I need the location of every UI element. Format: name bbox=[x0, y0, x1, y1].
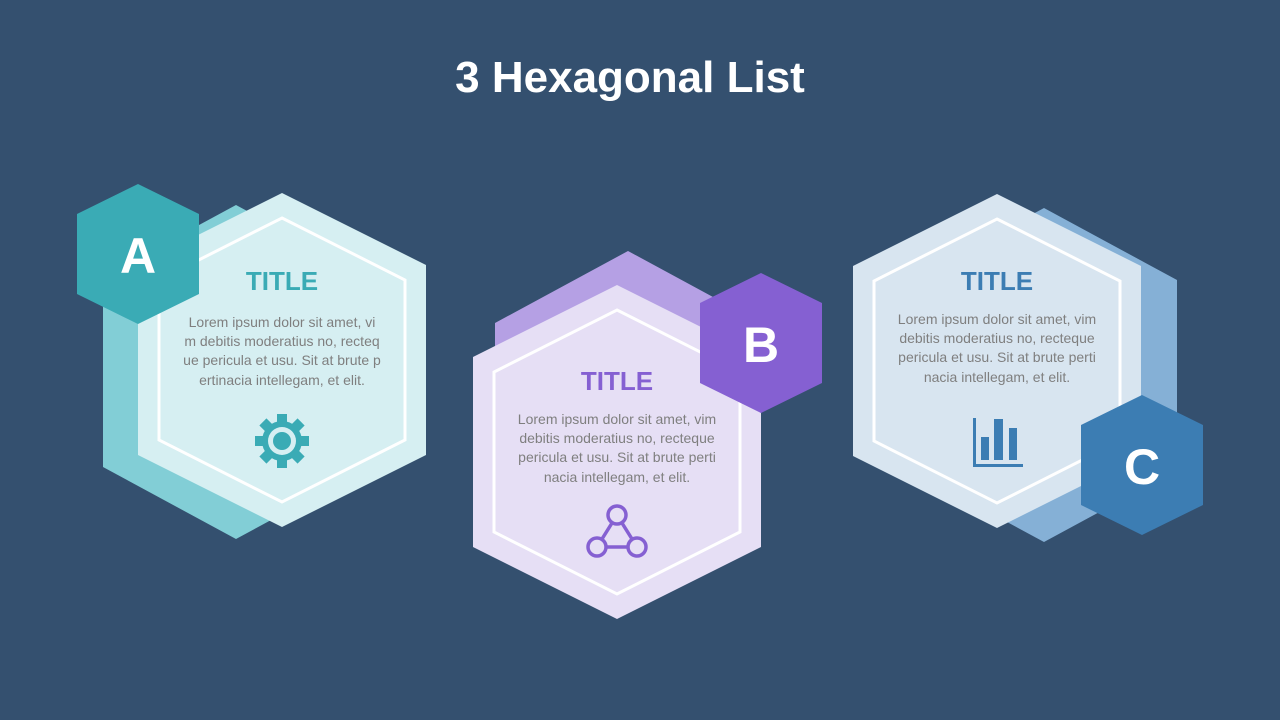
panel: A bbox=[77, 184, 426, 539]
panel: B bbox=[473, 251, 822, 619]
badge B: B bbox=[743, 317, 779, 373]
heading C: TITLE bbox=[961, 266, 1033, 296]
text A: ue pericula et usu. Sit at brute p bbox=[183, 352, 381, 368]
text B: pericula et usu. Sit at brute perti bbox=[518, 449, 716, 465]
badge A: A bbox=[120, 228, 156, 284]
text B: nacia intellegam, et elit. bbox=[544, 469, 690, 485]
text A: Lorem ipsum dolor sit amet, vi bbox=[189, 314, 375, 330]
icon: bar chart bbox=[973, 418, 1023, 467]
text A: m debitis moderatius no, recteq bbox=[184, 333, 380, 349]
text B: Lorem ipsum dolor sit amet, vim bbox=[518, 411, 716, 427]
icon: molecule bbox=[588, 506, 646, 556]
text C: debitis moderatius no, recteque bbox=[899, 330, 1095, 346]
text C: nacia intellegam, et elit. bbox=[924, 369, 1070, 385]
icon: gear bbox=[255, 414, 309, 468]
heading A: TITLE bbox=[246, 266, 318, 296]
badge B bbox=[700, 273, 822, 413]
badge C: C bbox=[1124, 439, 1160, 495]
heading B: TITLE bbox=[581, 366, 653, 396]
text B: debitis moderatius no, recteque bbox=[519, 430, 715, 446]
text A: ertinacia intellegam, et elit. bbox=[199, 372, 365, 388]
panel: C bbox=[853, 194, 1203, 542]
text C: pericula et usu. Sit at brute perti bbox=[898, 349, 1096, 365]
badge C bbox=[1081, 395, 1203, 535]
title: 3 Hexagonal List bbox=[455, 53, 805, 102]
text C: Lorem ipsum dolor sit amet, vim bbox=[898, 311, 1096, 327]
badge A bbox=[77, 184, 199, 324]
